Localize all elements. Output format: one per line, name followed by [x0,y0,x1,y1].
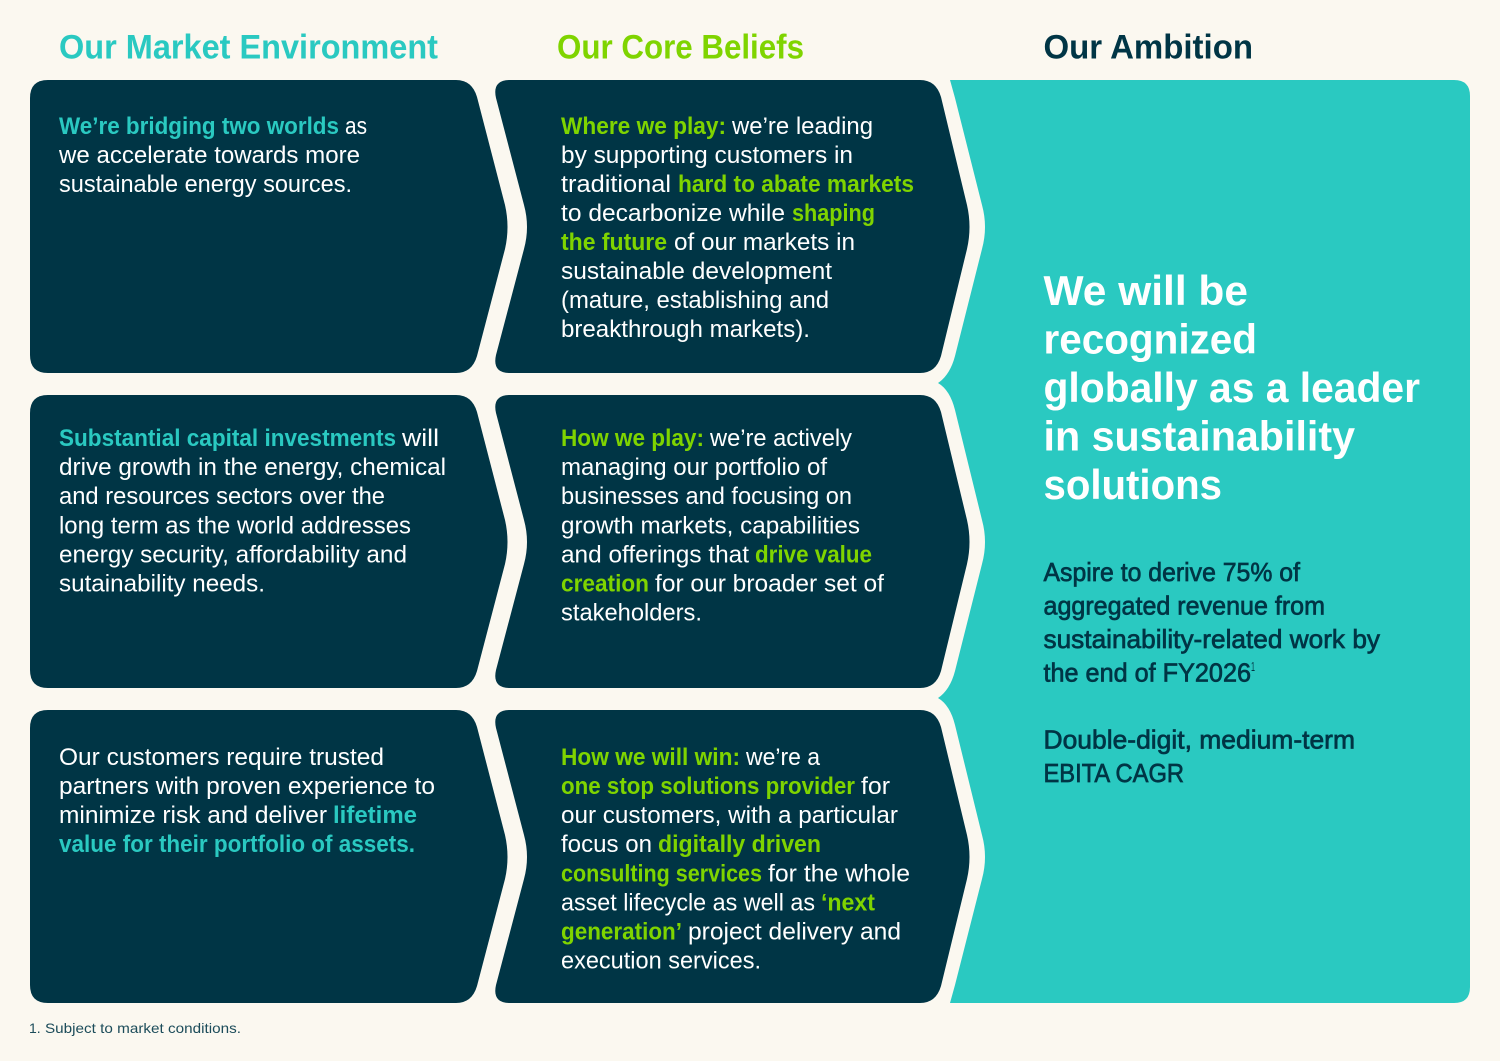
panel: market environment, bridging two worlds: we accelerate towards more [58,142,360,169]
panel: core beliefs, how we will win: execution services. [561,948,761,974]
panel: core beliefs, where we play [495,80,970,373]
panel: core beliefs, how we will win: for [861,773,890,800]
heading: Our Core Beliefs: Our Core Beliefs [557,28,804,66]
panel: core beliefs, where we play: hard to abate markets [678,171,914,198]
panel: core beliefs, where we play: breakthrough markets). [561,316,810,343]
revenue target: the end of FY2026 [1044,658,1251,688]
panel: core beliefs, how we will win: for the whole [768,860,910,888]
panel: core beliefs, how we play: and offerings that [561,542,749,568]
panel: market environment, bridging two worlds: We’re bridging two worlds [59,113,339,140]
panel: core beliefs, where we play: traditional [561,171,671,198]
panel: market environment, bridging two worlds [30,80,508,373]
panel: market environment, trusted partners [30,710,508,1003]
panel: market environment, trusted partners: Our customers require trusted [59,744,384,771]
panel: market environment, trusted partners: lifetime [333,802,417,829]
panel: core beliefs, how we play: businesses and focusing on [561,483,852,510]
panel: core beliefs, how we play: stakeholders. [561,600,702,626]
EBITA target: EBITA CAGR [1044,758,1184,788]
panel: market environment, capital investments: drive growth in the energy, chemical [59,454,446,481]
panel: ambition [938,80,1470,1003]
panel: core beliefs, how we will win: generation’ [561,918,682,946]
panel: core beliefs, how we will win: asset lifecycle as well as [561,890,815,916]
panel: market environment, capital investments: Substantial capital investments [59,425,396,452]
ambition statement [1044,267,1420,508]
footnote: Subject to market conditions. [45,1020,241,1036]
panel: core beliefs, how we will win: How we will win: [561,744,740,771]
panel: market environment, trusted partners: value for their portfolio of assets. [59,831,415,858]
EBITA target: Double-digit, medium-term [1044,724,1355,754]
panel: core beliefs, how we play: managing our portfolio of [561,454,827,481]
panel: core beliefs, how we will win [495,710,970,1003]
panel: core beliefs, how we will win: one stop solutions provider [561,773,855,800]
panel: core beliefs, how we will win: consulting services [561,860,762,888]
panel: core beliefs, how we play: growth markets, capabilities [561,512,860,540]
footnote: 1. [29,1020,41,1036]
panel: core beliefs, how we will win: our customers, with a particular [561,802,898,829]
revenue target: 1 [1251,659,1255,674]
panel: core beliefs, how we play: drive value [755,542,872,568]
revenue target [1044,557,1380,688]
panel: core beliefs, where we play: (mature, establishing and [561,287,829,314]
panel: market environment, bridging two worlds: sustainable energy sources. [59,171,352,198]
panel: market environment, trusted partners: minimize risk and deliver [59,802,327,829]
EBITA target [1044,724,1355,788]
panel: market environment, bridging two worlds: as [345,113,367,140]
panel: core beliefs, how we play: How we play: [561,425,704,452]
panel: market environment, capital investments: energy security, affordability and [59,542,407,568]
heading: Our Ambition: Our Ambition [1044,28,1253,66]
ambition statement: recognized [1044,316,1257,362]
panel: market environment, capital investments [30,395,508,688]
ambition statement: We will be [1044,267,1248,314]
panel: core beliefs, how we will win: ‘next [821,890,875,916]
panel: core beliefs, where we play: of our markets in [674,229,855,256]
panel: core beliefs, where we play: shaping [792,200,875,227]
panel: core beliefs, how we will win: project delivery and [688,918,901,946]
panel: core beliefs, how we play [495,395,970,688]
panel: core beliefs, where we play: the future [561,229,667,256]
panel: core beliefs, where we play: to decarbonize while [561,200,785,227]
panel: market environment, capital investments: long term as the world addresses [59,512,411,540]
panel: core beliefs, how we play: creation [561,570,649,598]
panel: core beliefs, how we will win: focus on [561,831,652,858]
revenue target: sustainability-related work by [1044,624,1380,654]
panel: core beliefs, where we play: sustainable development [561,258,832,285]
ambition statement: globally as a leader [1044,364,1420,411]
panel: core beliefs, how we will win: digitally driven [658,831,821,858]
heading: Our Market Environment: Our Market Environment [59,28,438,66]
panel: core beliefs, where we play: by supporting customers in [561,142,853,169]
panel: core beliefs, how we will win: we’re a [745,744,821,771]
panel: core beliefs, how we play: we’re actively [709,425,852,452]
panel: market environment, capital investments: will [401,425,439,452]
ambition statement: solutions [1044,461,1222,508]
revenue target: aggregated revenue from [1044,590,1325,620]
panel: market environment, trusted partners: partners with proven experience to [59,773,435,800]
panel: market environment, capital investments: and resources sectors over the [59,483,385,510]
ambition statement: in sustainability [1044,412,1356,460]
panel: core beliefs, how we play: for our broader set of [655,570,884,598]
panel: core beliefs, where we play: Where we play: [561,113,726,140]
panel: core beliefs, where we play: we’re leading [731,113,873,140]
panel: market environment, capital investments: sutainability needs. [59,570,265,598]
revenue target: Aspire to derive 75% of [1044,557,1301,587]
